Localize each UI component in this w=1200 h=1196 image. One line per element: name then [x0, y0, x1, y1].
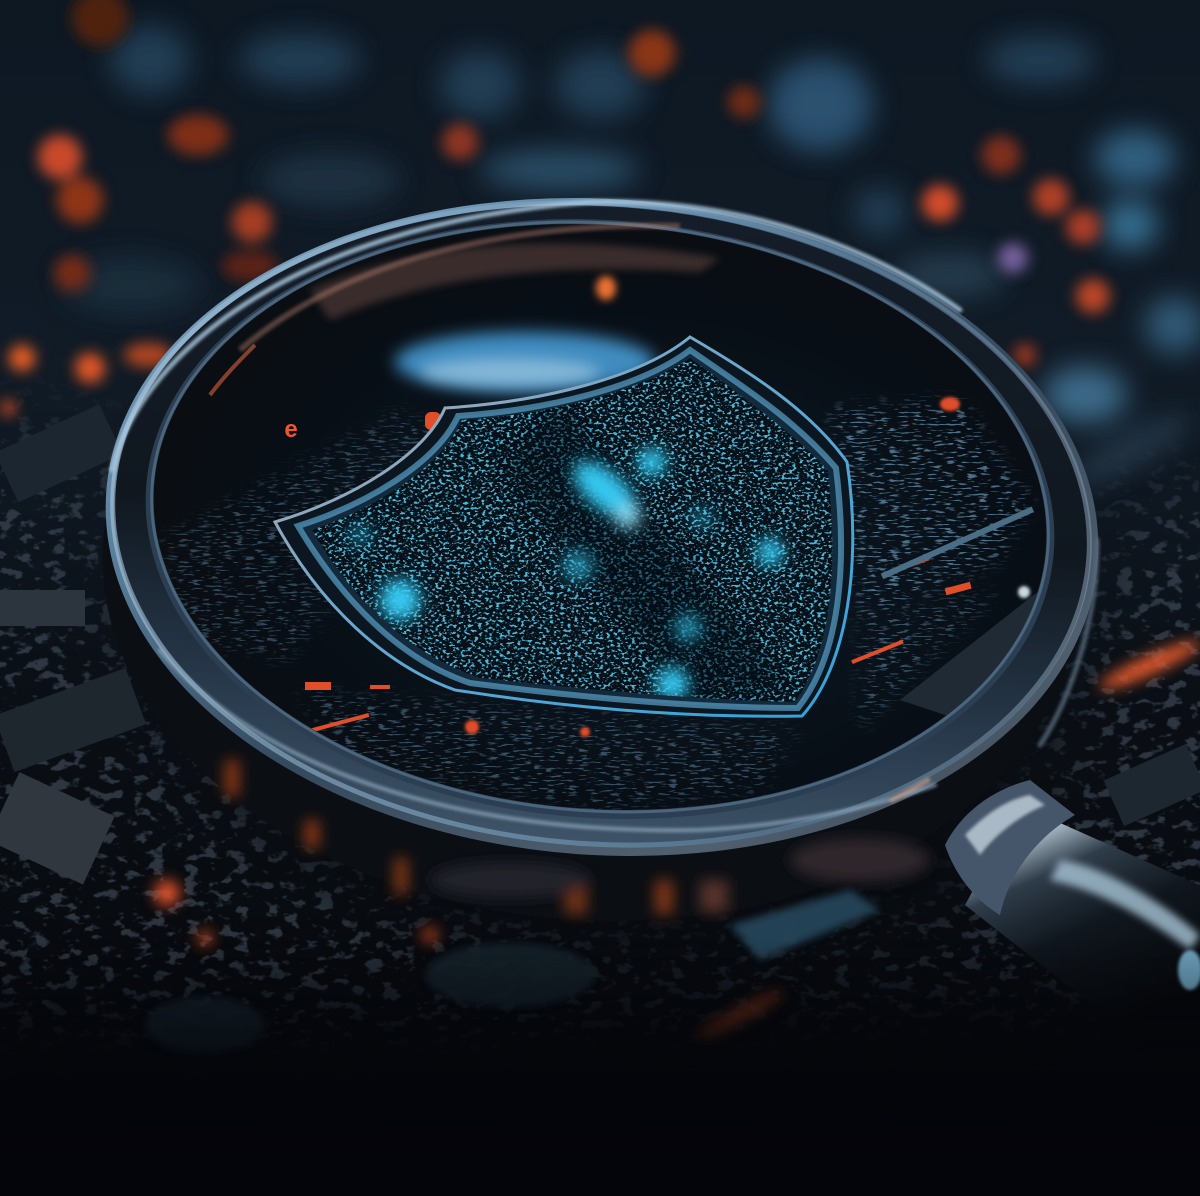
handle highlight	[1050, 860, 1200, 950]
lens top copper reflection	[310, 244, 720, 320]
glowing data hotspots	[349, 448, 783, 700]
orange glyph on the lens: e	[284, 416, 298, 443]
foreground: dark fade at the bottom	[0, 940, 1200, 1196]
bright diagonal bars on right of lens	[881, 507, 1034, 579]
background: blurred blue bokeh components	[60, 26, 1200, 497]
lens contents: magnified circuit data	[150, 244, 1060, 820]
magnifying glass: outer metal ring	[83, 165, 1121, 889]
handle shaft	[965, 805, 1200, 1050]
background: dark chip blocks on the left of the board	[0, 404, 1200, 884]
data text streaks around shield	[150, 370, 1050, 820]
shield: interior of glowing data specks	[300, 350, 840, 710]
dark diagonal shading across data	[500, 400, 790, 700]
foreground: dark chips in the lower board	[145, 890, 880, 1053]
lens: inner rim highlight	[132, 192, 1068, 842]
handle collar	[945, 780, 1075, 915]
shield: outer rim	[275, 337, 853, 716]
lens body: thick side wall of the rim with orange reflections	[79, 197, 1101, 953]
magnifying glass: metal handle	[945, 780, 1200, 1050]
outer ring specular highlights	[112, 202, 1097, 830]
magnifying glass: lens interior	[134, 195, 1066, 839]
background: circuit board component texture	[0, 409, 1200, 1026]
orange data highlights	[301, 276, 972, 737]
speck texture	[300, 350, 840, 710]
bright blue lens reflection	[395, 332, 655, 392]
